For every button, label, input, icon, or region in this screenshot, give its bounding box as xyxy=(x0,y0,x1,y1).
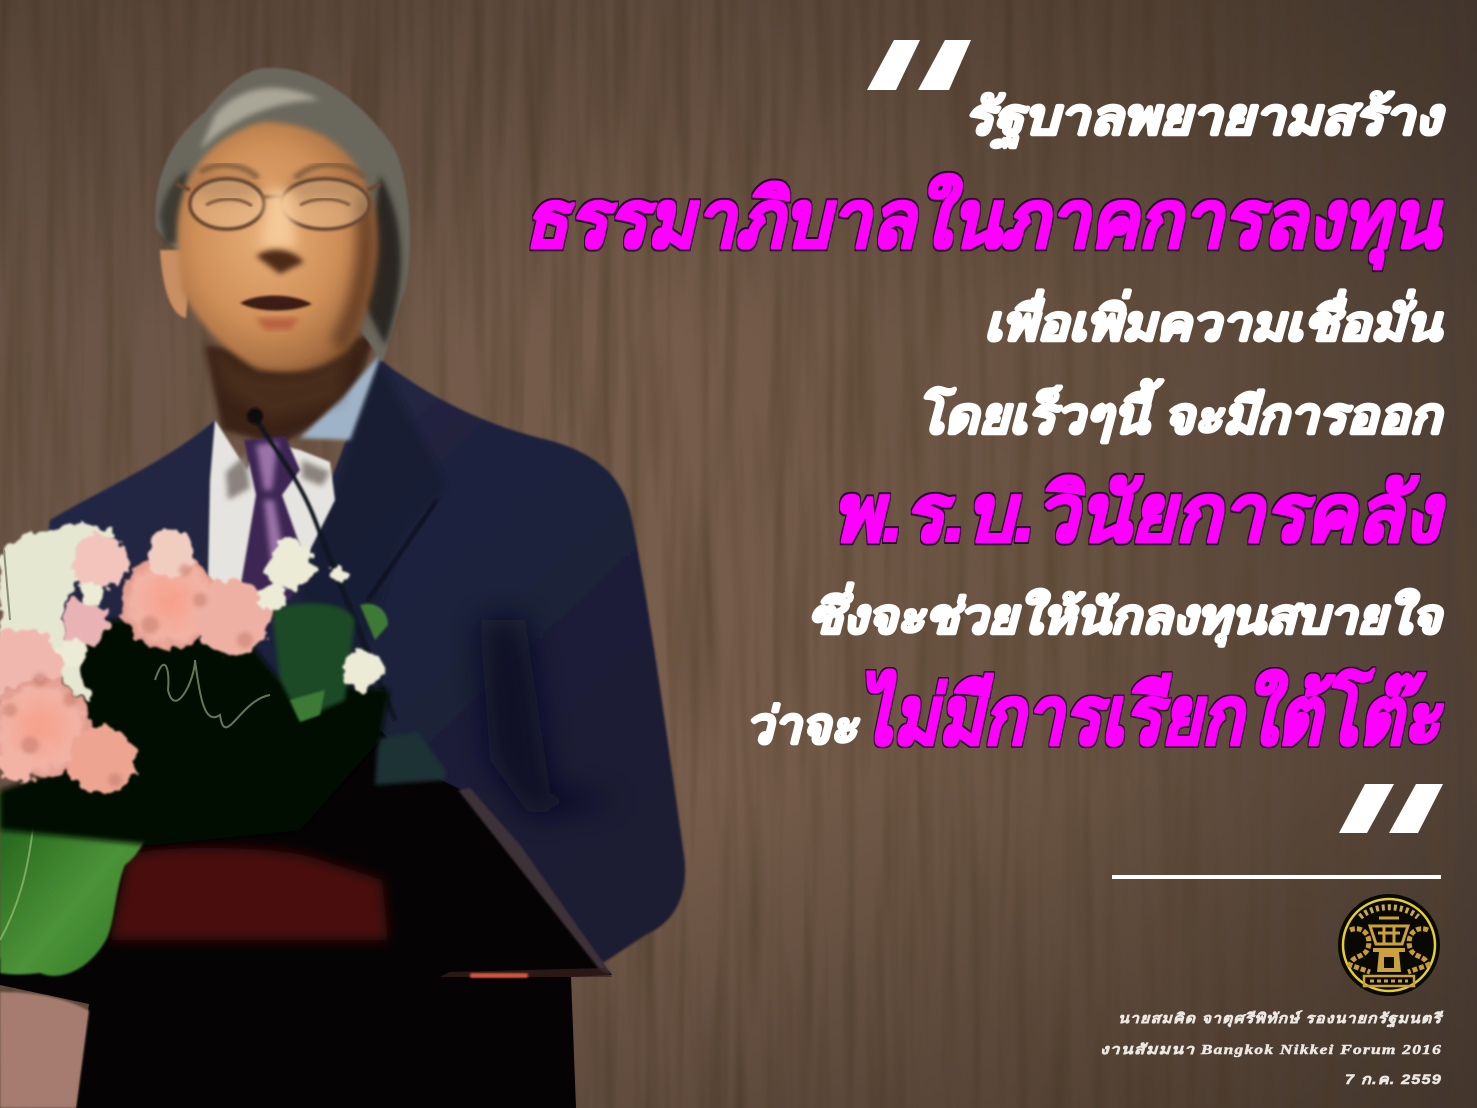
microphone stem xyxy=(254,416,395,720)
event name: งานสัมมนา Bangkok Nikkei Forum 2016 xyxy=(1100,1042,1442,1058)
carnations xyxy=(0,529,270,794)
line 2: highlighted: ธรรมาภิบาลในภาคการลงทุน xyxy=(524,173,1442,270)
jaw shadow xyxy=(210,340,345,420)
line 7 lead-in: ว่าจะ xyxy=(745,698,860,754)
line 3: เพื่อเพิ่มความเชื่อมั่น xyxy=(984,289,1443,351)
hair highlight xyxy=(200,88,320,150)
eyelids xyxy=(206,199,350,206)
small white flowers xyxy=(58,541,382,690)
seal right lion xyxy=(1408,929,1428,972)
seal crown arc xyxy=(1360,907,1418,917)
neck xyxy=(205,330,378,445)
red glint on lectern xyxy=(470,973,528,978)
line 5: highlighted: พ.ร.บ.วินัยการคลัง xyxy=(832,469,1446,559)
attribution text xyxy=(1100,1010,1444,1087)
date: 7 ก.ค. 2559 xyxy=(1345,1071,1442,1087)
face xyxy=(177,122,377,372)
nose bridge highlight xyxy=(262,190,296,248)
seal base xyxy=(1364,976,1414,986)
face right shadow xyxy=(330,190,375,355)
green leaves upper xyxy=(272,603,355,720)
closing quote mark xyxy=(1339,784,1443,833)
nose shadow xyxy=(256,250,304,274)
ear xyxy=(160,250,192,318)
seal pedestal xyxy=(1373,948,1405,972)
microphone head xyxy=(375,732,445,785)
dark side hair xyxy=(362,175,401,345)
line 4: โดยเร็วๆนี้ จะมีการออก xyxy=(916,379,1444,444)
sleeve shadow xyxy=(480,620,620,815)
lapel shadow xyxy=(300,358,447,680)
line 1: รัฐบาลพยายามสร้าง xyxy=(964,89,1445,150)
line 7: highlighted: ไม่มีการเรียกใต้โต๊ะ xyxy=(858,668,1443,761)
seal central bowl xyxy=(1370,918,1408,944)
left temple hair shade xyxy=(160,170,188,245)
pink wedge at lower left xyxy=(0,992,89,1108)
carnation shading xyxy=(3,564,253,787)
eyebrows xyxy=(200,164,365,178)
white shirt collar xyxy=(208,420,335,600)
white lily xyxy=(0,524,118,705)
portrait: speaker at lectern xyxy=(0,68,685,1108)
collar shadow xyxy=(226,455,330,500)
green leaf xyxy=(0,793,152,976)
speaker name: นายสมคิด จาตุศรีพิทักษ์ รองนายกรัฐมนตรี xyxy=(1118,1010,1444,1028)
red carpet reflection xyxy=(110,848,388,940)
seal left lion xyxy=(1350,929,1370,972)
mouth xyxy=(240,296,312,311)
icon: government seal xyxy=(1338,894,1440,996)
lectern body xyxy=(0,680,612,1108)
blue collar right xyxy=(300,352,382,440)
divider line xyxy=(1112,875,1441,879)
wire decoration xyxy=(155,660,270,727)
purple tie xyxy=(240,436,305,600)
lectern edge xyxy=(458,788,612,975)
hair xyxy=(155,68,410,362)
opening quote mark xyxy=(867,40,971,90)
line 6: ซึ่งจะช่วยให้นักลงทุนสบายใจ xyxy=(808,582,1444,647)
dark foliage xyxy=(0,620,390,845)
quote text xyxy=(524,89,1446,761)
suit jacket xyxy=(40,358,685,965)
glasses xyxy=(176,179,380,229)
eye sockets xyxy=(192,176,360,200)
